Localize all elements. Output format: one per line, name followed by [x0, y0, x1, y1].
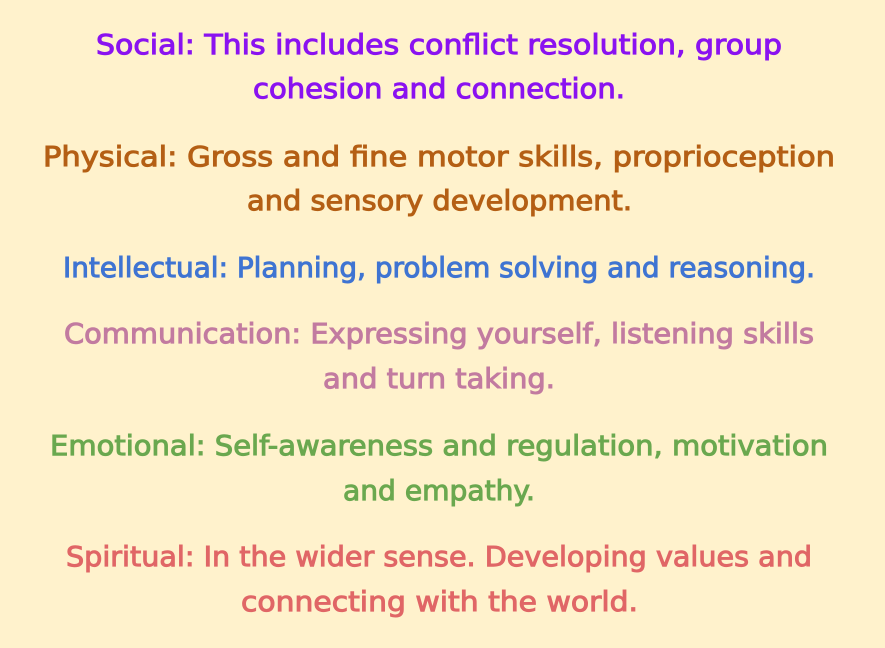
text block: Spiritual: Spiritual: In the wider sense. Developing values and [66, 540, 812, 573]
text block: Emotional: Emotional: Self-awareness and regulation, motivation [50, 429, 828, 462]
text block: Intellectual: Intellectual: Planning, problem solving and reasoning. [63, 251, 815, 284]
text block: Social: Social: This includes conflict resolution, group [96, 28, 782, 61]
text block: Physical: Physical: Gross and fine motor skills, proprioception [43, 140, 835, 173]
text block: Spiritual: connecting with the world. [241, 585, 638, 618]
text block: Emotional [50, 429, 828, 507]
text block: Communication [64, 317, 814, 395]
text block: Emotional: and empathy. [343, 474, 535, 507]
text block: Communication: and turn taking. [323, 362, 555, 395]
text block: Communication: Communication: Expressing yourself, listening skills [64, 317, 814, 350]
text block: Social [96, 28, 782, 105]
text block: Social: cohesion and connection. [253, 72, 625, 105]
text block: Physical [43, 140, 835, 217]
text block: Spiritual [66, 540, 812, 618]
text block: Physical: and sensory development. [247, 184, 632, 217]
